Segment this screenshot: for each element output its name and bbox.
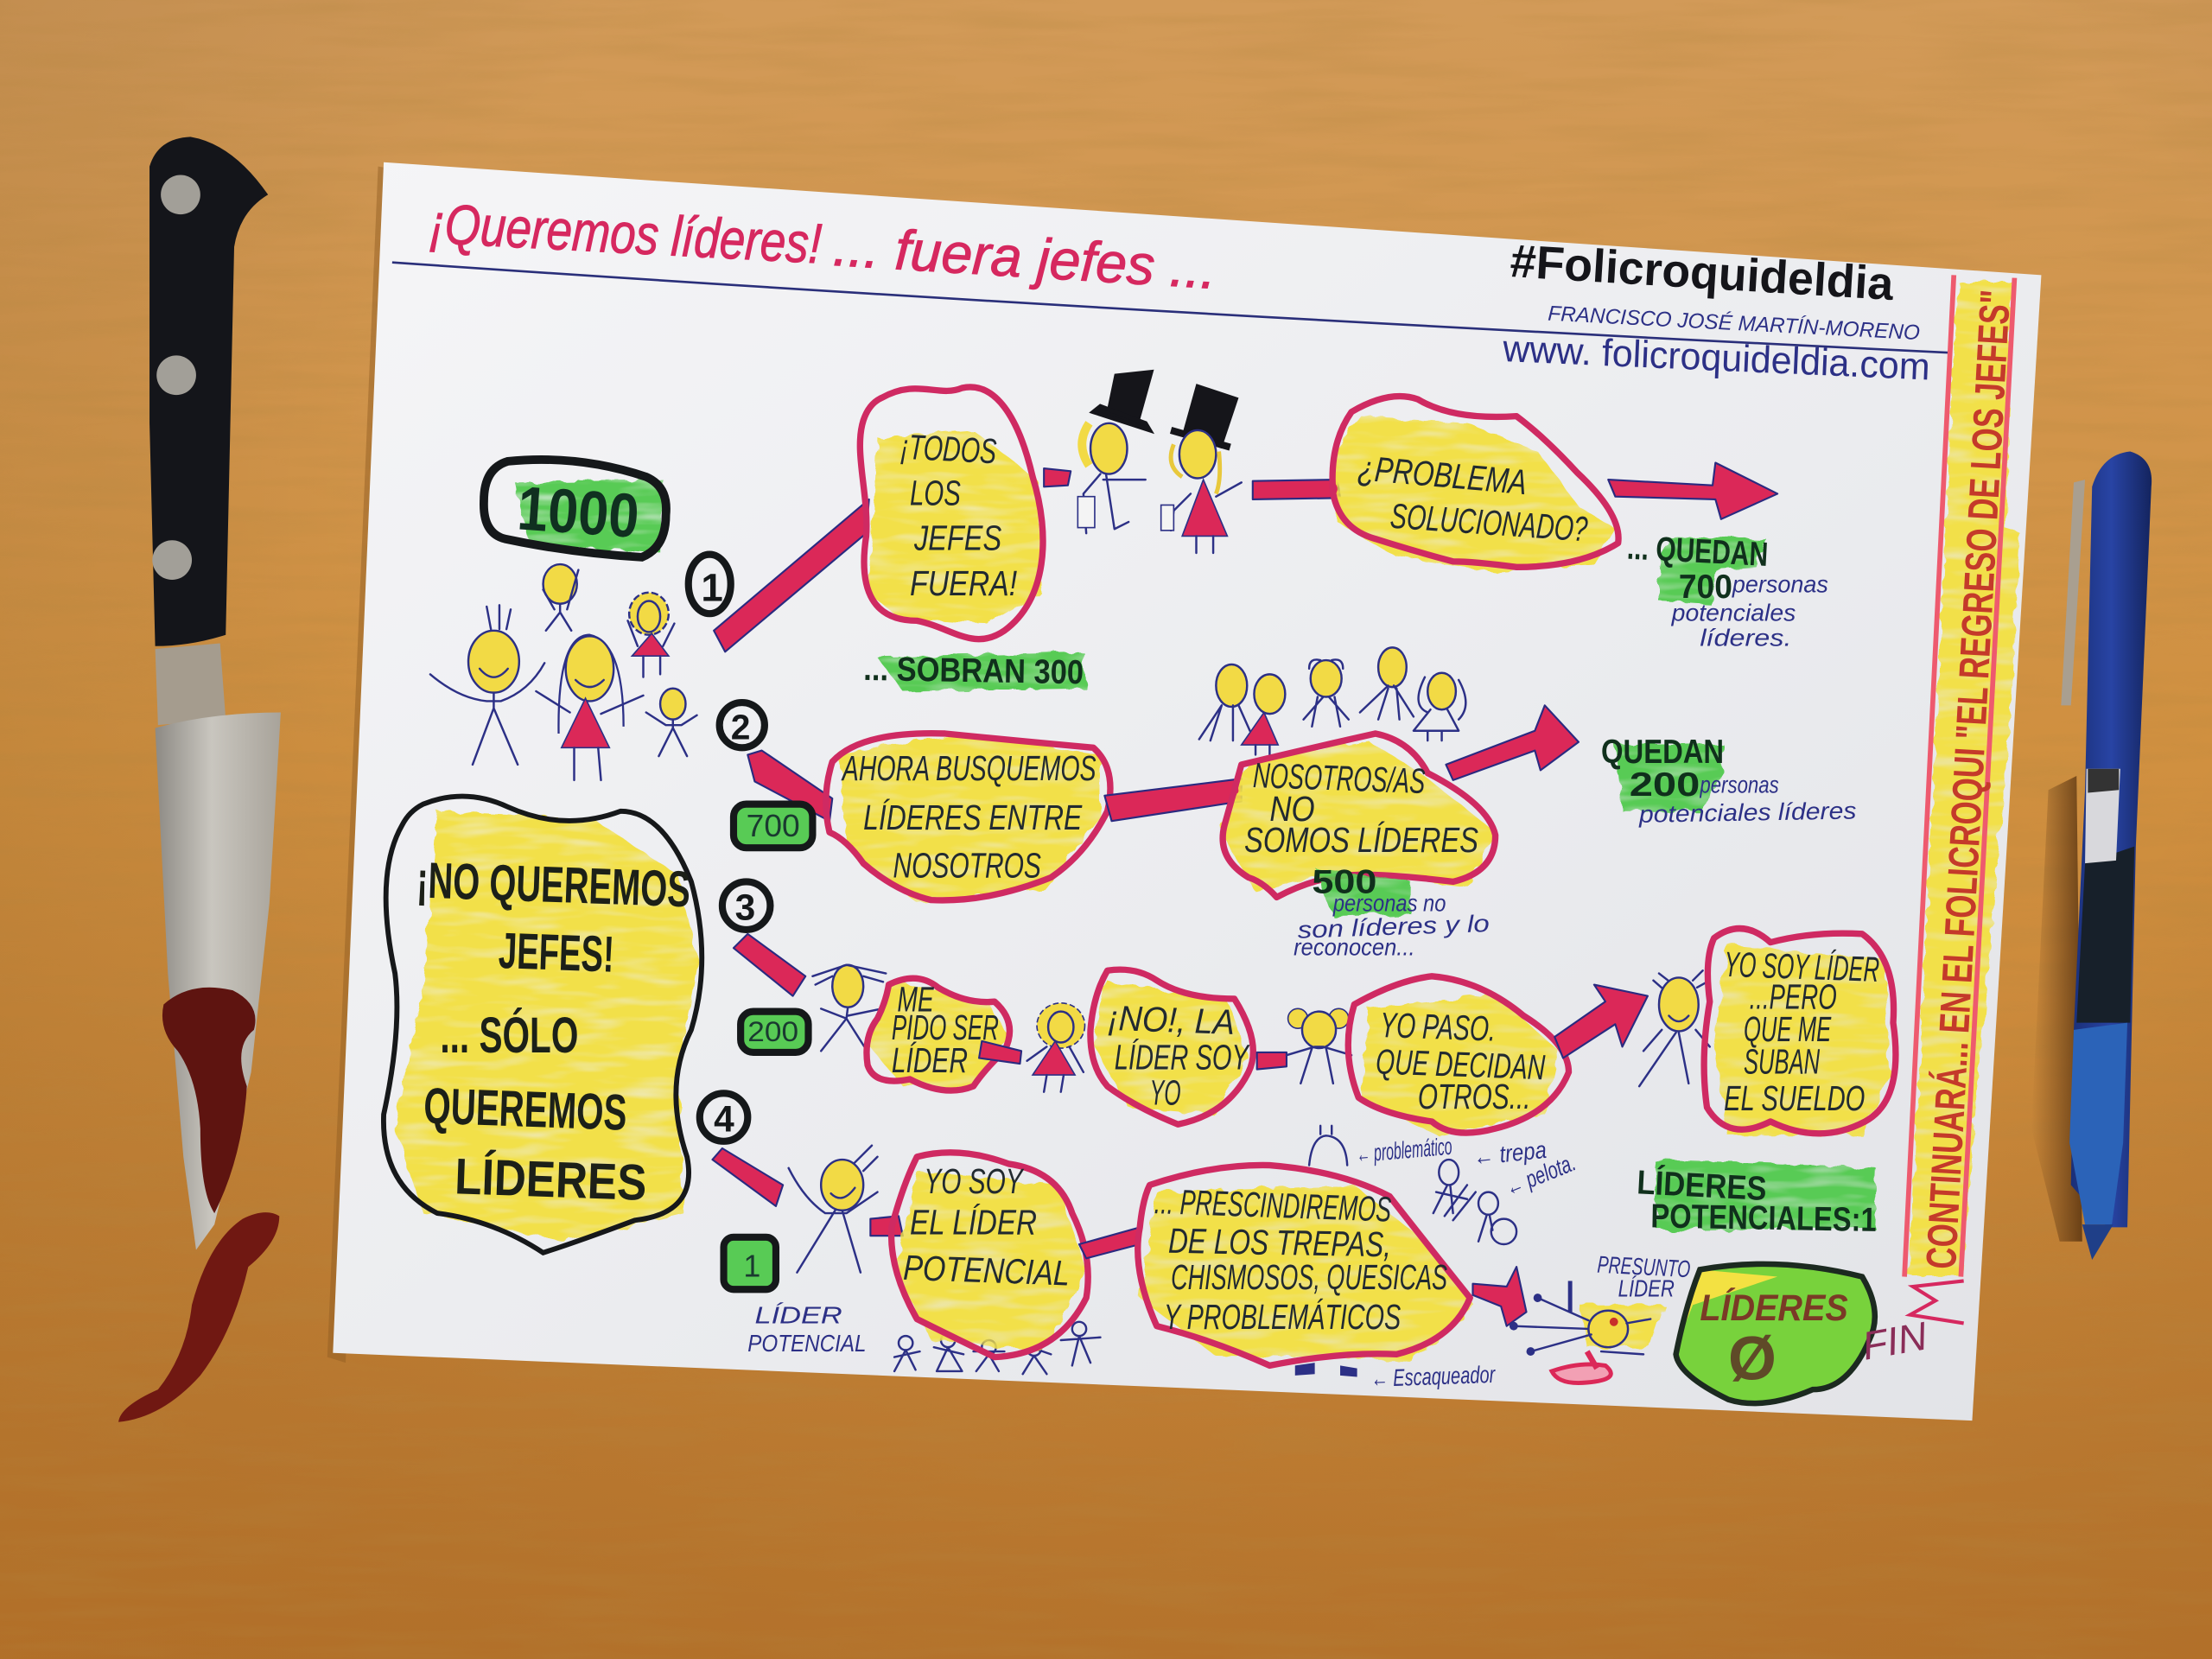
bubble: yo paso: YO PASO. — [1379, 1005, 1497, 1049]
callout: quedan 700 — [1626, 530, 1828, 652]
title — [429, 192, 1218, 301]
short arrow to pigtails figure — [1257, 1052, 1287, 1070]
two bosses with top hats — [1077, 370, 1242, 553]
counter: 1000: 1000 — [515, 474, 641, 551]
bubble: todos los jefes fuera: LOS — [910, 473, 961, 512]
hashtag and author block — [1501, 235, 1931, 389]
callout: quedan 700: potenciales — [1671, 599, 1796, 626]
row of small people — [894, 1322, 1100, 1374]
bubble: yo soy líder pero que me suban el sueldo: QUE ME — [1744, 1009, 1832, 1049]
arrow to second bubble — [747, 751, 832, 821]
bubble: ahora busquemos: NOSOTROS — [893, 846, 1041, 886]
callout: 500 personas: reconocen... — [1294, 933, 1415, 960]
callout: quedan 700: 700 — [1679, 569, 1732, 606]
bubble: yo soy el líder potencial: YO SOY — [924, 1161, 1025, 1201]
result box: líderes cero: Ø — [1728, 1325, 1777, 1394]
bubble: ahora busquemos: AHORA BUSQUEMOS — [841, 748, 1096, 788]
header rule — [392, 263, 1949, 353]
callout: quedan 700: líderes. — [1700, 625, 1791, 652]
callout: quedan 200: potenciales líderes — [1638, 797, 1857, 828]
callout: quedan 200: personas — [1700, 772, 1779, 798]
hashtag and author block: FRANCISCO JOSÉ MARTÍN-MORENO — [1548, 302, 1921, 345]
bubble: yo paso: QUE DECIDAN — [1376, 1041, 1546, 1087]
figure asking to be leader — [812, 965, 889, 1051]
bubble: nosotros no somos líderes: SOMOS LÍDERES — [1244, 820, 1478, 860]
arrow row four — [712, 1148, 783, 1206]
hashtag and author block: #Folicroquideldia — [1509, 235, 1896, 310]
callout: quedan 200: 200 — [1630, 766, 1700, 804]
bubble: yo soy el líder potencial: POTENCIAL — [903, 1248, 1071, 1294]
arrow between bubbles row two — [1104, 779, 1242, 821]
bubble: ahora busquemos: LÍDERES ENTRE — [863, 798, 1083, 837]
bubble: problema solucionado — [1332, 397, 1618, 571]
bubble: me pido ser líder — [867, 978, 1009, 1090]
caption: líder potencial: POTENCIAL — [747, 1330, 866, 1357]
bubble: yo soy el líder potencial: EL LÍDER — [910, 1203, 1037, 1243]
bubble: me pido ser líder: LÍDER — [892, 1040, 968, 1080]
annotated figures: problemático, trepa, pelota, escaqueador — [1295, 1126, 1580, 1392]
caption: presunto líder — [1597, 1251, 1691, 1301]
step number 3 — [722, 881, 770, 930]
annotated figures: problemático, trepa, pelota, escaqueador: ← Escaqueador — [1370, 1361, 1497, 1392]
short arrow to yo soy bubble — [870, 1216, 903, 1236]
box: 1 — [724, 1237, 776, 1289]
callout: 500 personas: son líderes y lo — [1297, 910, 1490, 944]
step number 1 — [689, 555, 731, 613]
big bubble: no queremos jefes: LÍDERES — [454, 1147, 647, 1211]
caption: presunto líder: PRESUNTO — [1597, 1251, 1691, 1282]
big bubble: no queremos jefes — [384, 797, 702, 1253]
bubble: yo paso — [1348, 976, 1569, 1135]
figure with pigtails — [1287, 1008, 1351, 1084]
step number 1: 1 — [701, 566, 723, 610]
blue pen — [2031, 451, 2152, 1260]
bubble: yo soy el líder potencial — [892, 1153, 1088, 1357]
up-right arrow row two — [1446, 705, 1579, 780]
big bubble: no queremos jefes: ¡NO QUEREMOS — [416, 852, 691, 918]
bubble: prescindiremos: ... PRESCINDIREMOS — [1154, 1181, 1392, 1230]
callout: quedan 700: ... QUEDAN — [1626, 530, 1769, 574]
annotated figures: problemático, trepa, pelota, escaqueador: ← trepa — [1472, 1136, 1548, 1171]
bubble: me pido ser líder: PIDO SER — [892, 1007, 999, 1047]
callout: quedan 200 — [1601, 734, 1857, 828]
bubble: prescindiremos — [1138, 1165, 1474, 1365]
bubble: yo soy líder pero que me suban el sueldo: ...PERO — [1749, 976, 1837, 1016]
caption: líder potencial — [747, 1301, 866, 1357]
arrow row three — [734, 934, 805, 996]
bubble: yo soy líder pero que me suban el sueldo: YO SOY LÍDER — [1724, 944, 1880, 989]
arrow to first bubble — [714, 499, 869, 652]
result box: líderes cero — [1676, 1264, 1875, 1403]
step number 2 — [720, 702, 765, 747]
arrow into problema bubble — [1253, 480, 1340, 499]
callout: quedan 200: QUEDAN — [1601, 734, 1724, 771]
callout: quedan 700: personas — [1732, 571, 1828, 598]
bubble: todos los jefes fuera: FUERA! — [910, 563, 1017, 603]
bubble: no, la líder soy yo — [1090, 969, 1253, 1124]
arrow into dead boss — [1472, 1267, 1527, 1326]
callout: líderes potenciales 1: LÍDERES — [1636, 1163, 1768, 1208]
arrow out of problema bubble — [1608, 463, 1777, 519]
bubble: todos los jefes fuera: ¡TODOS — [899, 427, 997, 471]
title: ... fuera jefes ... — [831, 214, 1218, 301]
box: 1: 1 — [743, 1249, 760, 1284]
bubble: yo paso: OTROS... — [1418, 1077, 1530, 1116]
bubble: yo soy líder pero que me suban el sueldo: EL SUELDO — [1724, 1078, 1865, 1118]
bubble: nosotros no somos líderes — [1220, 734, 1496, 897]
bubble: nosotros no somos líderes: NOSOTROS/AS — [1252, 755, 1426, 801]
arrow pointing left to líder bubble — [1079, 1227, 1140, 1258]
bubble: todos los jefes fuera — [860, 387, 1043, 639]
fallen presumed leader with dagger — [1510, 1281, 1665, 1383]
bubble: ahora busquemos — [826, 734, 1110, 903]
bubble: no, la líder soy yo: YO — [1150, 1072, 1181, 1112]
result box: líderes cero: LÍDERES — [1700, 1287, 1848, 1328]
callout: líderes potenciales 1: POTENCIALES:1 — [1650, 1198, 1877, 1239]
step number 3: 3 — [735, 887, 755, 927]
callout: 500 personas — [1294, 863, 1490, 960]
potential leader figure — [789, 1146, 878, 1273]
big bubble: no queremos jefes: QUEREMOS — [423, 1078, 628, 1141]
five listening people — [1199, 647, 1465, 754]
callout: 500 personas: 500 — [1312, 863, 1376, 900]
callout: sobran 300: ... SOBRAN 300 — [863, 651, 1084, 691]
bubble: no, la líder soy yo: ¡NO!, LA — [1107, 998, 1236, 1042]
bubble: todos los jefes fuera: JEFES — [913, 518, 1001, 558]
annotated figures: problemático, trepa, pelota, escaqueador: ← problemático — [1355, 1133, 1453, 1167]
bubble: me pido ser líder: ME — [897, 980, 934, 1020]
up-right arrow row three — [1554, 985, 1648, 1058]
sheet of paper — [327, 162, 2041, 1421]
bubble: yo soy líder pero que me suban el sueldo — [1704, 929, 1896, 1135]
big bubble: no queremos jefes: ... SÓLO — [440, 1007, 578, 1064]
bubble: problema solucionado: SOLUCIONADO? — [1389, 496, 1589, 550]
bubble: no, la líder soy yo: LÍDER SOY — [1115, 1038, 1250, 1077]
title: ¡Queremos líderes! — [429, 192, 823, 276]
bubble: prescindiremos: DE LOS TREPAS, — [1168, 1221, 1391, 1264]
bubble: yo soy líder pero que me suban el sueldo: SUBAN — [1744, 1041, 1820, 1081]
step number 4 — [700, 1093, 747, 1141]
step number 4: 4 — [714, 1098, 734, 1139]
kitchen knife with ketchup — [118, 137, 281, 1422]
box: 200 — [741, 1012, 809, 1052]
short arrow to bosses — [1044, 468, 1071, 486]
caption: líder potencial: LÍDER — [754, 1301, 842, 1328]
step number 2: 2 — [731, 708, 750, 747]
big bubble: no queremos jefes: JEFES! — [498, 923, 615, 983]
bubble: prescindiremos: Y PROBLEMÁTICOS — [1164, 1297, 1401, 1337]
counter: 1000 — [484, 460, 666, 557]
caption: presunto líder: LÍDER — [1618, 1274, 1675, 1301]
box: 700: 700 — [747, 808, 800, 843]
box: 200: 200 — [747, 1015, 798, 1047]
fin: FIN — [1859, 1313, 1931, 1369]
short arrow to curly girl — [979, 1041, 1021, 1064]
hashtag and author block: www. folicroquideldia.com — [1501, 327, 1931, 389]
bubble: prescindiremos: CHISMOSOS, QUESICAS — [1171, 1257, 1447, 1297]
callout: líderes potenciales 1 — [1636, 1160, 1877, 1239]
happy figure with spiky hair — [1639, 970, 1710, 1086]
box: 700 — [734, 804, 812, 848]
curly-haired girl — [1027, 1003, 1085, 1092]
side banner: continuará — [1904, 275, 2020, 1323]
bubble: problema solucionado: ¿PROBLEMA — [1357, 448, 1529, 502]
callout: 500 personas: personas no — [1332, 890, 1446, 917]
group of people — [430, 564, 697, 780]
annotated figures: problemático, trepa, pelota, escaqueador: ← pelota. — [1502, 1149, 1580, 1201]
bubble: nosotros no somos líderes: NO — [1269, 789, 1315, 829]
